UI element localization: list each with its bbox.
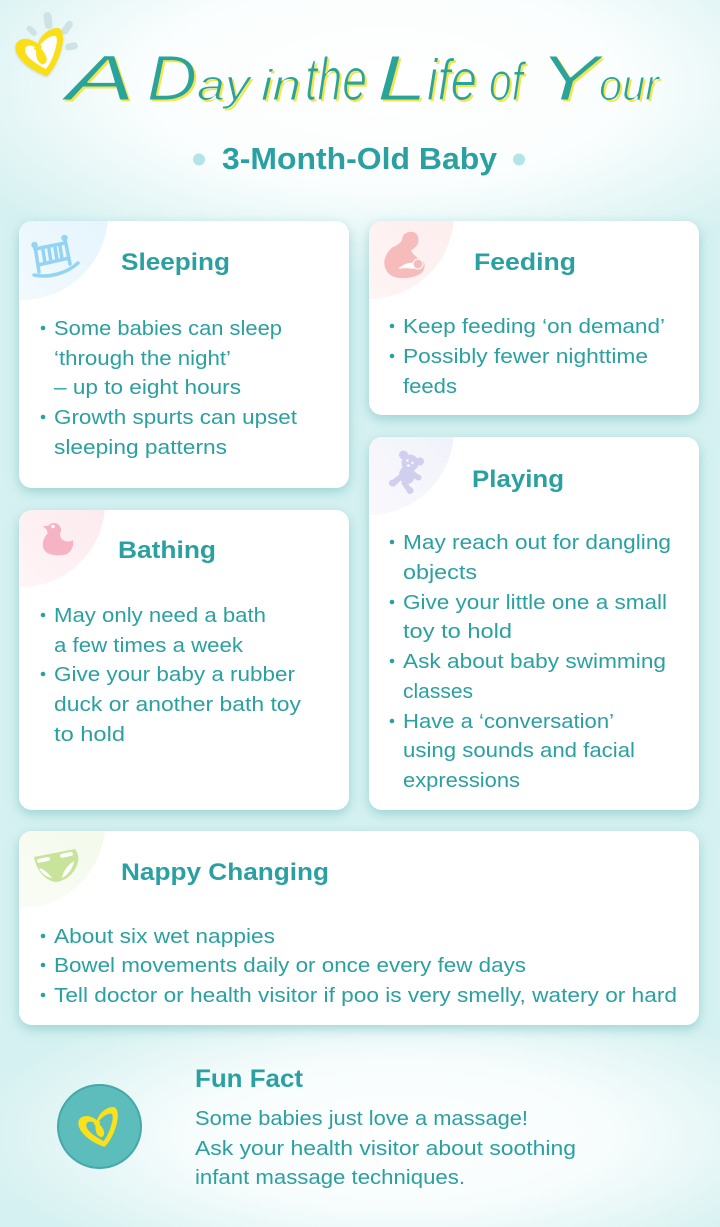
fun fact text: infant massage techniques. xyxy=(195,1167,465,1189)
fun fact text: Ask your health visitor about soothing xyxy=(195,1138,576,1160)
bullet list: feeding: Possibly fewer nighttime xyxy=(403,346,648,368)
bullet list: feeding: feeds xyxy=(403,376,457,398)
bullet list: playing xyxy=(390,532,671,792)
heading: playing: Playing xyxy=(472,466,564,493)
title xyxy=(60,42,661,114)
heading: bathing: Bathing xyxy=(118,537,216,564)
bullet list: bathing: Give your baby a rubber xyxy=(54,664,295,686)
bullet list: playing: Ask about baby swimming xyxy=(403,651,666,673)
bullet list: feeding xyxy=(390,316,665,398)
title: A xyxy=(60,42,135,114)
title: D xyxy=(147,42,197,114)
title: ife xyxy=(427,48,477,113)
bullet list: playing: Give your little one a small xyxy=(403,592,667,614)
title: the xyxy=(305,46,367,113)
bullet list: playing: using sounds and facial xyxy=(403,740,635,762)
subtitle: 3-Month-Old Baby xyxy=(222,141,498,176)
icon: rubber duck xyxy=(43,523,73,555)
icon: nappy xyxy=(34,849,78,882)
bullet list: playing: expressions xyxy=(403,770,520,792)
panel: feeding xyxy=(362,218,705,425)
bullet list: sleeping: – up to eight hours xyxy=(54,377,241,399)
bullet list: bathing: a few times a week xyxy=(54,635,244,657)
heading: sleeping: Sleeping xyxy=(121,249,230,276)
panel: bathing xyxy=(13,508,355,820)
bullet list: bathing: to hold xyxy=(54,724,125,746)
title: ay xyxy=(197,61,253,110)
bullet list: sleeping: Growth spurts can upset xyxy=(54,407,297,429)
icon: teddy bear xyxy=(389,450,424,494)
title: of xyxy=(489,52,527,112)
fun fact text xyxy=(195,1065,576,1189)
bullet list: bathing xyxy=(41,605,301,746)
bullet list: bathing: May only need a bath xyxy=(54,605,266,627)
title: in xyxy=(261,61,301,110)
title: Y xyxy=(539,42,605,114)
panel: sleeping xyxy=(13,218,356,498)
icon: crib xyxy=(32,236,78,276)
fun fact text: Some babies just love a massage! xyxy=(195,1108,528,1130)
bullet list: playing: Have a ‘conversation’ xyxy=(403,711,614,733)
bullet list: playing: objects xyxy=(403,562,477,584)
icon: mother and baby xyxy=(384,232,425,278)
bullet list: playing: May reach out for dangling xyxy=(403,532,671,554)
bullet list: nappy changing: Bowel movements daily or once every few days xyxy=(54,955,526,977)
bullet list: nappy changing: Tell doctor or health visitor if poo is very smelly, watery or hard xyxy=(54,985,677,1007)
bullet list: nappy changing xyxy=(41,926,677,1007)
bullet list: playing: classes xyxy=(403,681,473,703)
heading: nappy changing: Nappy Changing xyxy=(121,859,329,886)
bullet list: sleeping: sleeping patterns xyxy=(54,437,227,459)
bullet list: playing: toy to hold xyxy=(403,621,512,643)
bullet list: feeding: Keep feeding ‘on demand’ xyxy=(403,316,665,338)
bullet list: sleeping: Some babies can sleep xyxy=(54,318,282,340)
logo: heart with rays xyxy=(15,12,78,76)
title: L xyxy=(377,42,427,114)
fun fact text: Fun Fact xyxy=(195,1065,304,1093)
bullet list: nappy changing: About six wet nappies xyxy=(54,926,275,948)
bullet list: sleeping: ‘through the night’ xyxy=(54,348,231,370)
icon: fun fact badge xyxy=(58,1085,141,1168)
bullet list: sleeping xyxy=(41,318,297,459)
panel: playing xyxy=(363,435,705,820)
bullet list: bathing: duck or another bath toy xyxy=(54,694,301,716)
panel: nappy changing xyxy=(13,829,705,1036)
title: our xyxy=(599,61,661,110)
heading: feeding: Feeding xyxy=(474,249,576,276)
